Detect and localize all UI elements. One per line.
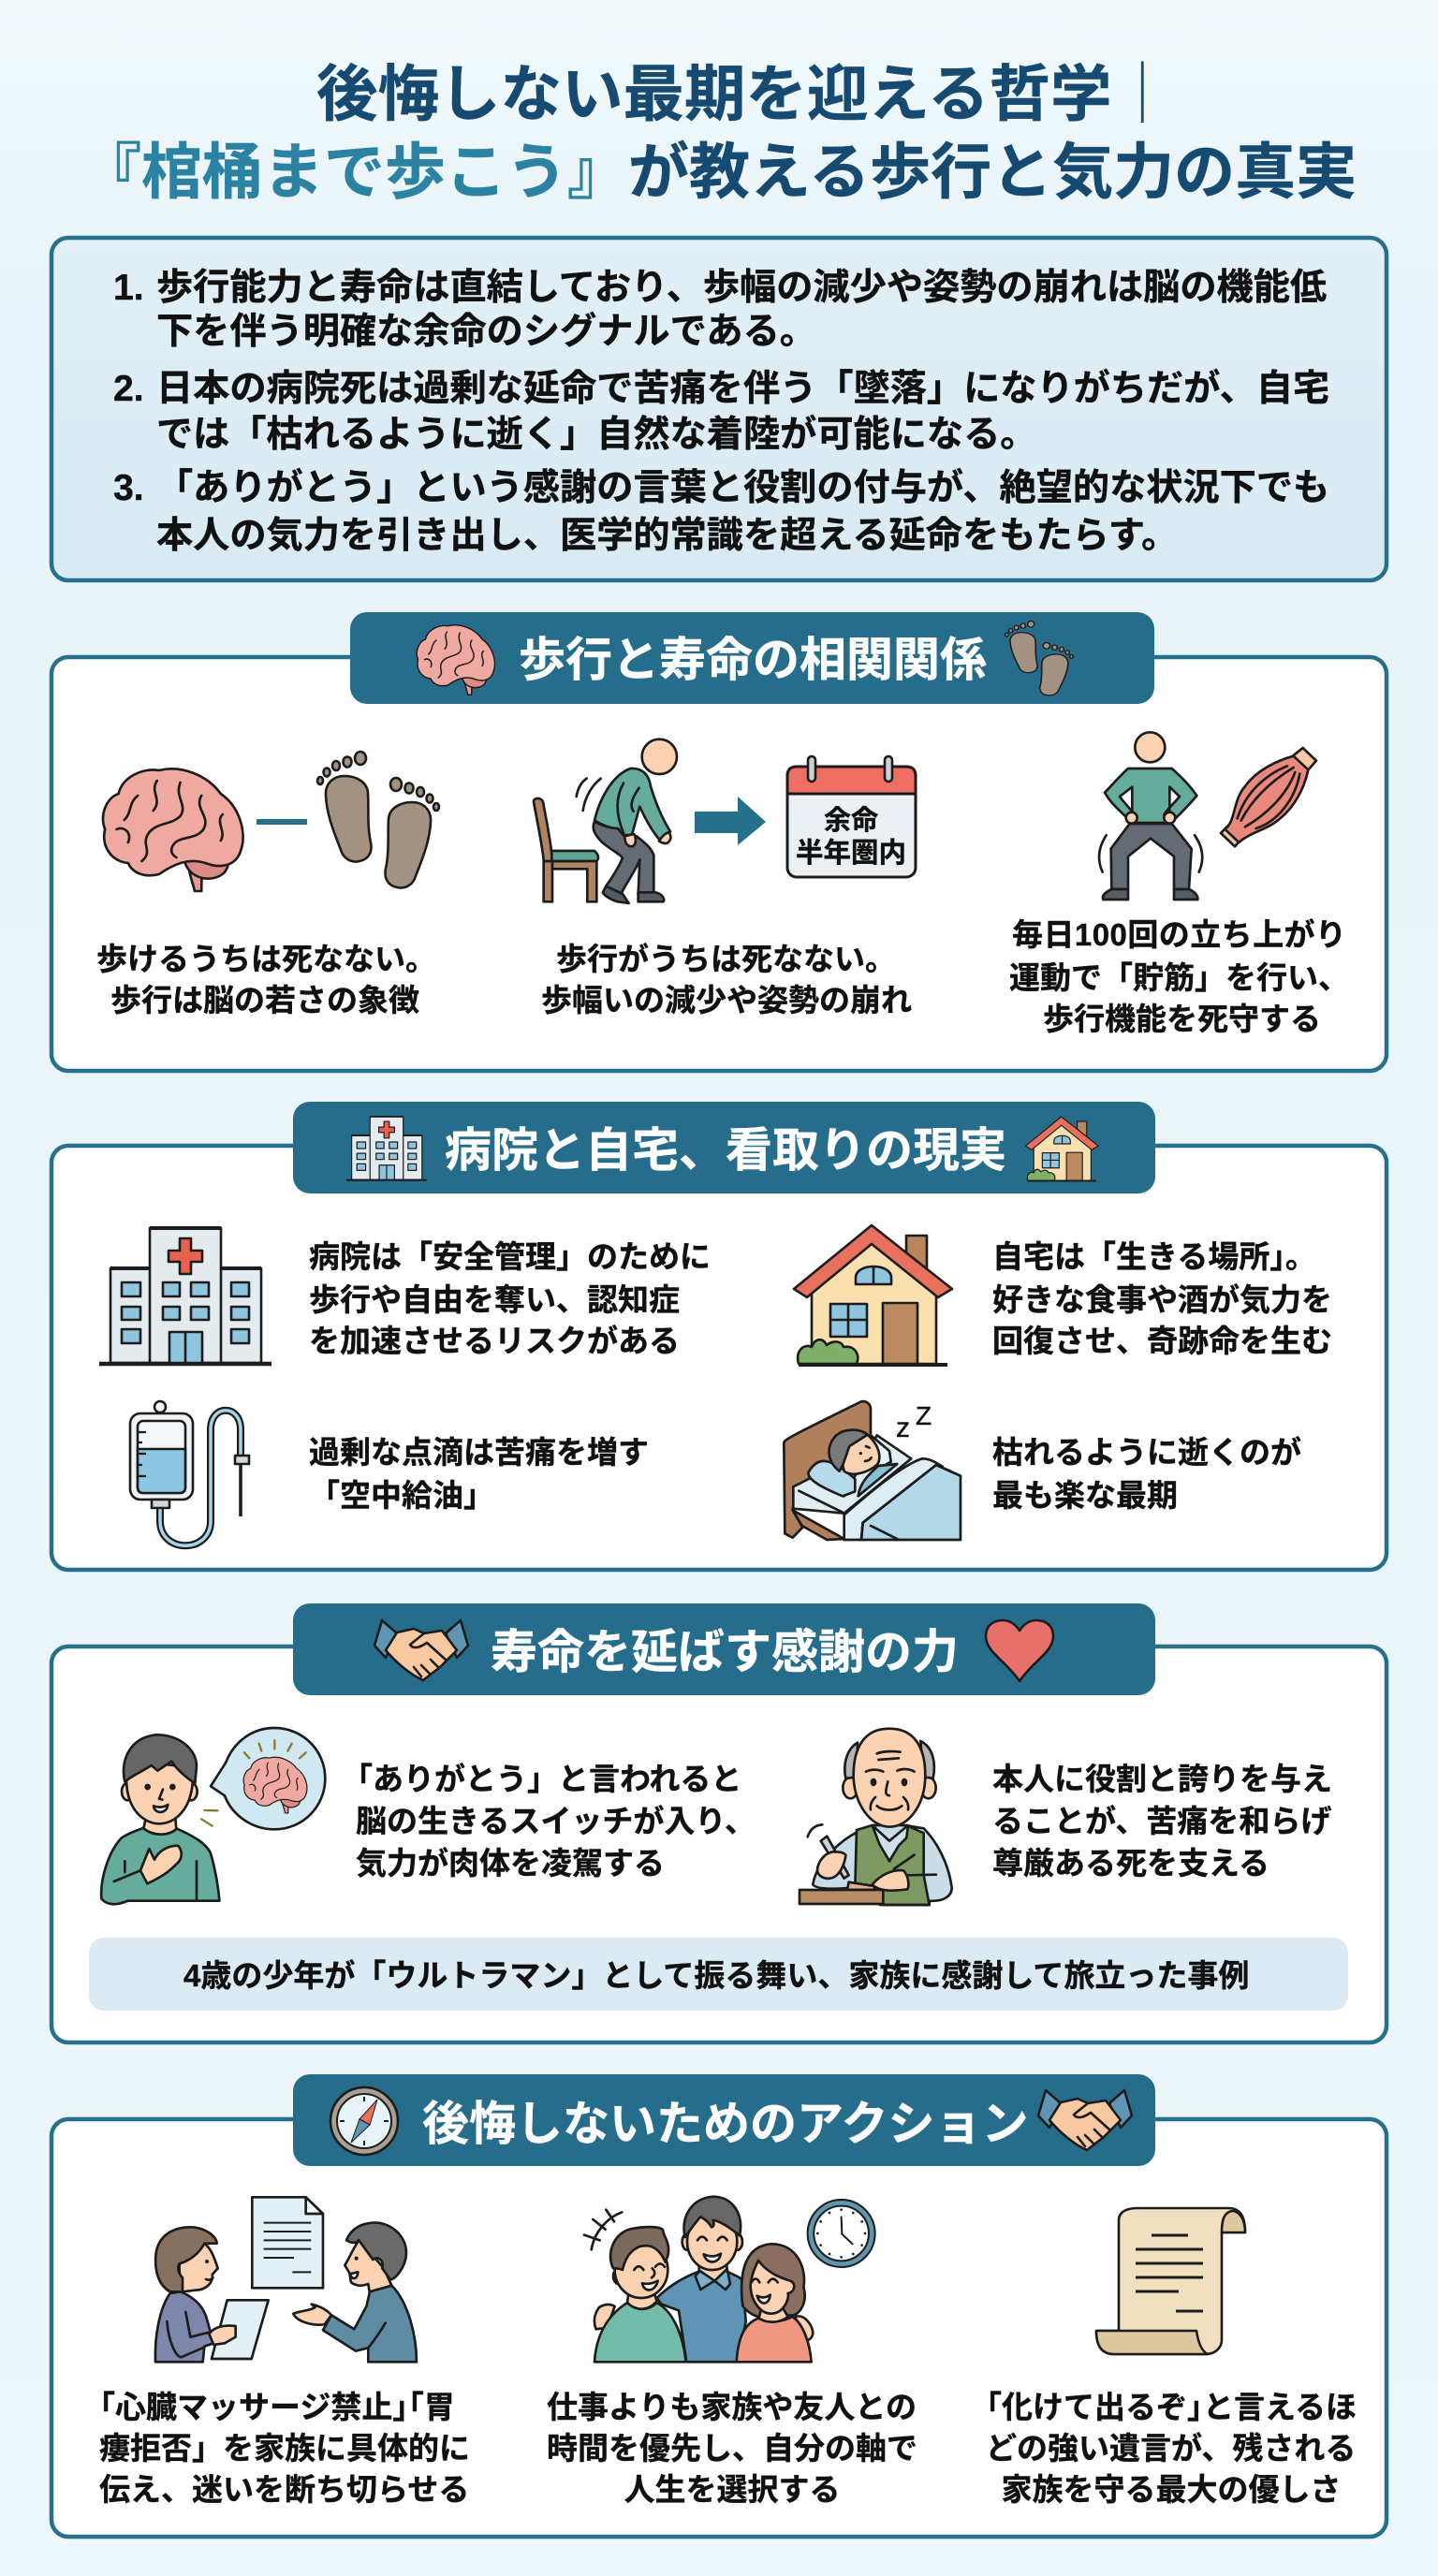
summary point 1: 歩行能力と寿命は直結しており、歩幅の減少や姿勢の崩れは脳の機能低 <box>156 268 1327 308</box>
title: 後悔しない最期を迎える哲学｜ <box>316 60 1173 128</box>
caption: prioritize family: 仕事よりも家族や友人との <box>547 2390 917 2424</box>
text: home as place to live <box>992 1239 1332 1358</box>
text: thank you switch <box>342 1762 756 1881</box>
icon: calendar, remaining life within half a year: 余命 <box>824 805 878 836</box>
icon: house <box>794 1225 952 1365</box>
caption: prioritize family <box>547 2390 917 2507</box>
heading bar: walking and lifespan: 歩行と寿命の相関関係 <box>519 634 987 686</box>
heading bar: actions: 後悔しないためのアクション <box>422 2098 1028 2150</box>
text: withering away peacefully: 最も楽な最期 <box>992 1478 1178 1513</box>
panel: summary <box>51 238 1387 580</box>
text: role and pride: 尊厳ある死を支える <box>992 1846 1269 1881</box>
icon: person with hand on chest and brain speech bubble <box>101 1728 325 1904</box>
caption: signs of decline <box>541 942 912 1017</box>
icon: IV drip <box>130 1401 249 1545</box>
caption: signs of decline: 歩幅いの減少や姿勢の崩れ <box>541 983 912 1017</box>
text: hospital risk: を加速させるリスクがある <box>309 1324 680 1358</box>
caption: walking and the brain: 歩けるうちは死なない。 <box>96 942 436 976</box>
caption: prioritize family: 時間を優先し、自分の軸で <box>547 2431 917 2466</box>
text: excessive drip <box>309 1435 649 1513</box>
caption: walking and the brain <box>96 942 436 1017</box>
panel: hospital and home <box>51 1102 1387 1570</box>
caption: tell family specifics: 伝え、迷いを断ち切らせる <box>99 2472 469 2507</box>
title: 『棺桶まで歩こう』が教える歩行と気力の真実 <box>81 138 1357 206</box>
icon: hospital <box>99 1228 271 1364</box>
caption: prioritize family: 人生を選択する <box>624 2472 841 2507</box>
text: role and pride: 本人に役割と誇りを与え <box>992 1762 1332 1796</box>
text: hospital risk <box>309 1239 711 1358</box>
text: withering away peacefully <box>992 1435 1301 1513</box>
sleeping z letters: Z <box>916 1401 932 1430</box>
text: thank you switch: 「ありがとう」と言われると <box>342 1762 741 1796</box>
summary point 2 <box>113 369 1329 455</box>
caption: daily sit-to-stand exercise: 歩行機能を死守する <box>1043 1002 1321 1036</box>
icon: stooped man rising from chair <box>534 739 677 903</box>
callout: example of a four-year-old boy: 4歳の少年が「ウルトラマン」として振る舞い、家族に感謝して旅立った事例 <box>183 1958 1249 1993</box>
summary point 3: 本人の気力を引き出し、医学的常識を超える延命をもたらす。 <box>156 516 1178 556</box>
summary point 1: 1. <box>113 268 144 308</box>
text: home as place to live: 回復させ、奇跡命を生む <box>992 1324 1332 1358</box>
icon: family and clock <box>584 2197 875 2362</box>
summary point 2: 2. <box>113 369 144 409</box>
text: hospital risk: 歩行や自由を奪い、認知症 <box>309 1282 680 1317</box>
heading bar: power of gratitude <box>293 1603 1155 1695</box>
text: home as place to live: 好きな食事や酒が気力を <box>992 1282 1332 1317</box>
summary point 3: 3. <box>113 468 144 508</box>
title <box>81 60 1357 206</box>
icon: will scroll <box>1096 2208 1245 2354</box>
icon: muscle <box>1221 748 1316 846</box>
icon: two people discussing a document <box>155 2197 417 2362</box>
panel: actions <box>51 2074 1387 2537</box>
sleeping z letters: z <box>896 1412 910 1443</box>
heading bar: walking and lifespan <box>350 612 1154 704</box>
heading bar: hospital and home <box>293 1102 1155 1193</box>
heading bar: actions <box>293 2074 1155 2166</box>
caption: daily sit-to-stand exercise: 運動で「貯筋」を行い、 <box>1009 960 1349 995</box>
caption: strong will: 家族を守る最大の優しさ <box>1002 2472 1341 2507</box>
panel: power of gratitude <box>51 1603 1387 2042</box>
caption: tell family specifics: 瘻拒否」を家族に具体的に <box>99 2431 470 2466</box>
summary point 3 <box>113 468 1329 556</box>
caption: daily sit-to-stand exercise: 毎日100回の立ち上がり <box>1012 917 1346 952</box>
summary point 2: では「枯れるように逝く」自然な着陸が可能になる。 <box>156 415 1037 455</box>
icon: calendar, remaining life within half a year: 半年圏内 <box>796 838 906 869</box>
caption: tell family specifics <box>84 2390 470 2507</box>
panel: walking and lifespan <box>51 612 1387 1071</box>
icon: calendar, remaining life within half a year <box>787 756 916 877</box>
text: thank you switch: 気力が肉体を凌駕する <box>356 1846 665 1881</box>
sleeping z letters <box>896 1401 932 1443</box>
caption: strong will: どの強い遺言が、残される <box>986 2431 1356 2466</box>
icon: squatting man <box>1099 732 1202 900</box>
summary point 2: 日本の病院死は過剰な延命で苦痛を伴う「墜落」になりがちだが、自宅 <box>156 369 1329 409</box>
caption: daily sit-to-stand exercise <box>1009 917 1349 1036</box>
callout: example of a four-year-old boy <box>89 1938 1348 2011</box>
arrow <box>695 797 766 845</box>
caption: signs of decline: 歩行がうちは死なない。 <box>556 942 896 976</box>
summary point 3: 「ありがとう」という感謝の言葉と役割の付与が、絶望的な状況下でも <box>156 468 1329 508</box>
icon: elderly man carving wood <box>800 1729 952 1905</box>
text: excessive drip: 「空中給油」 <box>309 1478 494 1513</box>
text: home as place to live: 自宅は「生きる場所」。 <box>992 1239 1316 1274</box>
text: role and pride <box>992 1762 1332 1881</box>
summary point 1 <box>113 268 1327 352</box>
icon: person sleeping in bed <box>784 1401 961 1540</box>
text: excessive drip: 過剰な点滴は苦痛を増す <box>309 1435 649 1470</box>
caption: tell family specifics: 「心臓マッサージ禁止」「胃 <box>84 2390 455 2424</box>
text: role and pride: ることが、苦痛を和らげ <box>992 1804 1331 1838</box>
icon: brain and feet <box>103 752 439 891</box>
caption: strong will <box>971 2390 1357 2507</box>
text: hospital risk: 病院は「安全管理」のために <box>309 1239 711 1274</box>
caption: walking and the brain: 歩行は脳の若さの象徴 <box>110 983 419 1017</box>
heading bar: hospital and home: 病院と自宅、看取りの現実 <box>445 1124 1006 1177</box>
text: thank you switch: 脳の生きるスイッチが入り、 <box>356 1804 756 1838</box>
heading bar: power of gratitude: 寿命を延ばす感謝の力 <box>491 1626 959 1678</box>
caption: strong will: 「化けて出るぞ」と言えるほ <box>971 2390 1357 2424</box>
summary point 1: 下を伴う明確な余命のシグナルである。 <box>156 312 816 352</box>
text: withering away peacefully: 枯れるように逝くのが <box>992 1435 1301 1470</box>
